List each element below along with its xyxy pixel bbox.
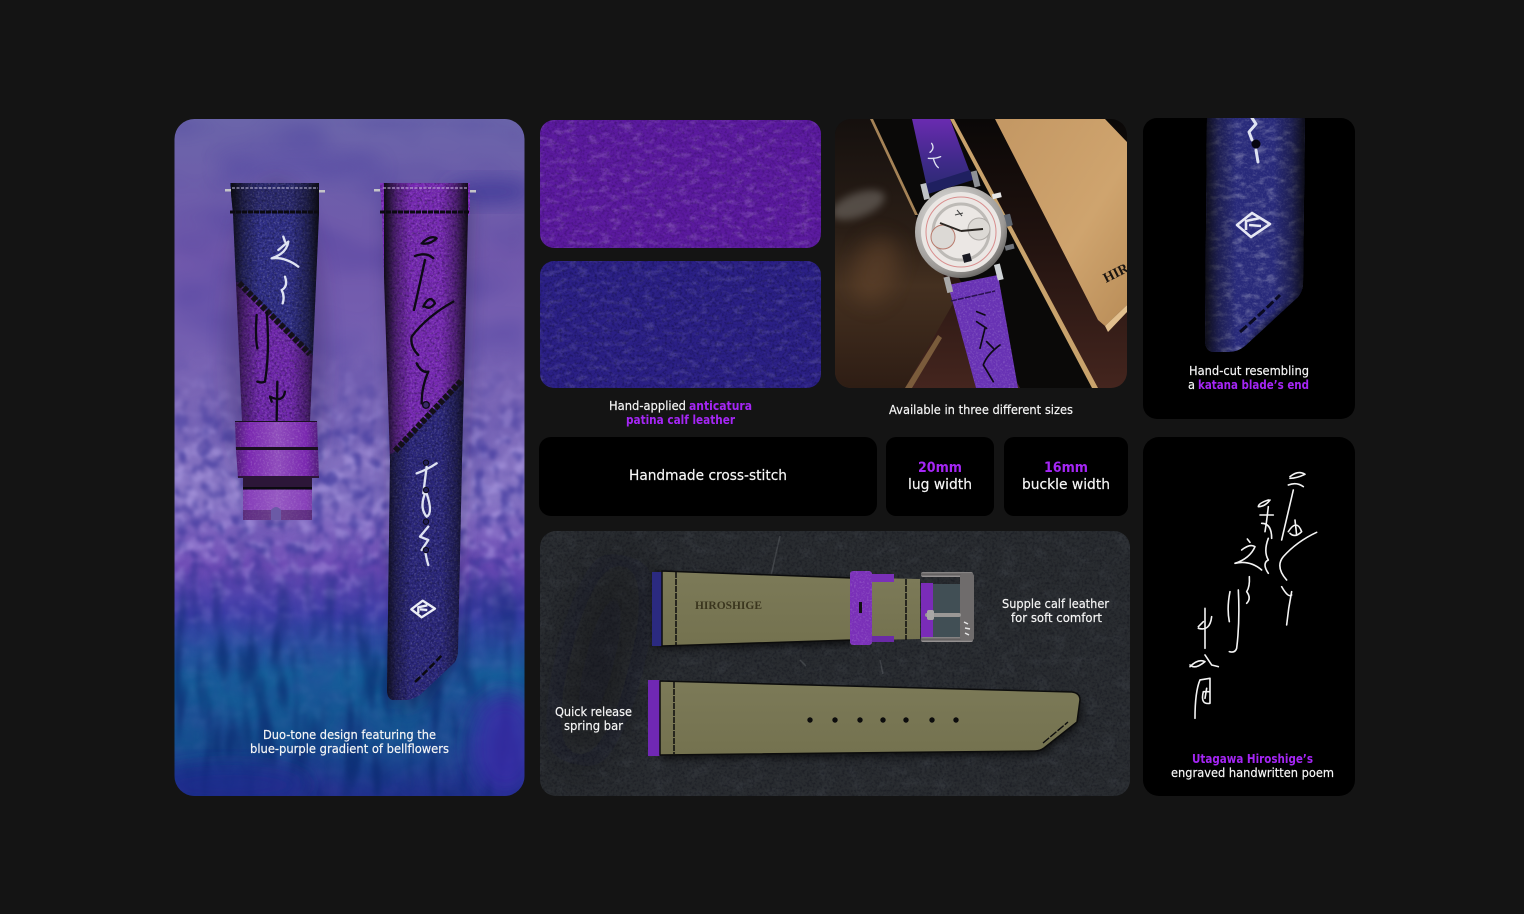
caption: katana blade's end: katana blade’s end: [1198, 377, 1309, 392]
panel: handmade cross-stitch: [539, 437, 877, 516]
panel: Hiroshige handwritten poem: [1143, 437, 1355, 796]
caption: quick release spring bar: spring bar: [564, 718, 624, 733]
caption: katana blade's end: a: [1188, 377, 1195, 392]
panel: watch on box photo: [828, 119, 1132, 390]
panel: 16mm buckle width: buckle width: [1022, 477, 1110, 493]
caption: anticatura patina leather: anticatura: [689, 398, 752, 413]
panel: 20mm lug width: [886, 437, 994, 516]
engraved poem on long strap: [411, 237, 453, 408]
panel: handmade cross-stitch: Handmade cross-stitch: [629, 468, 787, 484]
cross-stitch diagonal: [239, 283, 310, 354]
icon: diamond brand mark: [411, 601, 435, 617]
caption: supple calf leather: for soft comfort: [1011, 610, 1102, 625]
caption: quick release spring bar: [555, 704, 632, 733]
blurred bellflower background: [174, 119, 524, 796]
caption: Utagawa Hiroshige's poem: [1171, 751, 1334, 780]
photo background: [828, 119, 1127, 388]
caption: anticatura patina leather: [609, 398, 752, 427]
short strap back with buckle: [652, 571, 974, 649]
long strap back with holes: [648, 680, 1082, 759]
panel: bellflower photo with duo-tone straps: [174, 119, 524, 796]
kraft box: HIR: [1101, 261, 1132, 287]
engraved poem on short strap: [256, 237, 298, 420]
caption: quick release spring bar: Quick release: [555, 704, 632, 719]
strap tip close-up: [1205, 118, 1305, 352]
panel: purple leather swatch: [540, 120, 821, 248]
caption: Utagawa Hiroshige's poem: engraved handwritten poem: [1171, 765, 1334, 780]
caption: Utagawa Hiroshige's poem: Utagawa Hiroshige’s: [1192, 751, 1313, 766]
panel: strap backs on slate: [540, 531, 1130, 796]
caption: supple calf leather: Supple calf leather: [1002, 596, 1110, 611]
caption: duo-tone design: Duo-tone design featuring the: [263, 727, 436, 742]
caption: katana blade's end: Hand-cut resembling: [1189, 363, 1309, 378]
kraft box: [995, 119, 1132, 332]
caption: katana blade's end: [1188, 363, 1309, 392]
watch straps: [912, 119, 1020, 390]
long strap, front side: [374, 175, 480, 710]
icon: diamond brand mark: [1237, 213, 1270, 237]
caption: duo-tone design: blue-purple gradient of bellflowers: [250, 741, 449, 756]
panel: 16mm buckle width: 16mm: [1044, 460, 1088, 476]
panel: 16mm buckle width: [1004, 437, 1128, 516]
keepers and short strap tail: [235, 421, 319, 520]
caption: anticatura patina leather: patina calf leather: [626, 412, 736, 427]
panel: blue leather swatch: [540, 261, 821, 388]
handwritten poem strokes: [1190, 473, 1317, 718]
caption: three sizes: Available in three different sizes: [889, 402, 1073, 417]
caption: duo-tone design: [250, 727, 449, 756]
slate background: [540, 531, 1130, 796]
caption: anticatura patina leather: Hand-applied: [609, 398, 686, 413]
short strap, front side: [225, 175, 330, 523]
panel: 20mm lug width: lug width: [908, 477, 972, 493]
panel: katana blade end: [1143, 118, 1355, 419]
caption: supple calf leather: [1002, 598, 1110, 622]
panel: 20mm lug width: 20mm: [918, 460, 962, 476]
watch: [915, 170, 1014, 294]
short strap back with buckle: HIROSHIGE: [695, 598, 762, 612]
